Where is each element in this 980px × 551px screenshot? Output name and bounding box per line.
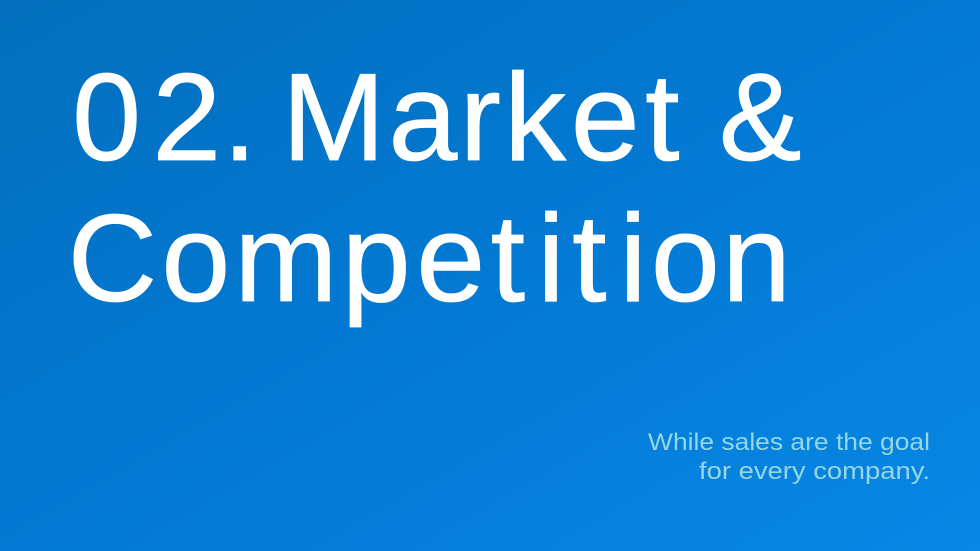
subtitle text [648, 429, 930, 485]
subtitle line 1: While sales are the goal [648, 429, 930, 456]
title line 1: 02. Market & [72, 49, 802, 187]
subtitle line 2: for every company. [699, 458, 930, 485]
title line 2: Competition [68, 190, 791, 328]
title [68, 49, 802, 328]
